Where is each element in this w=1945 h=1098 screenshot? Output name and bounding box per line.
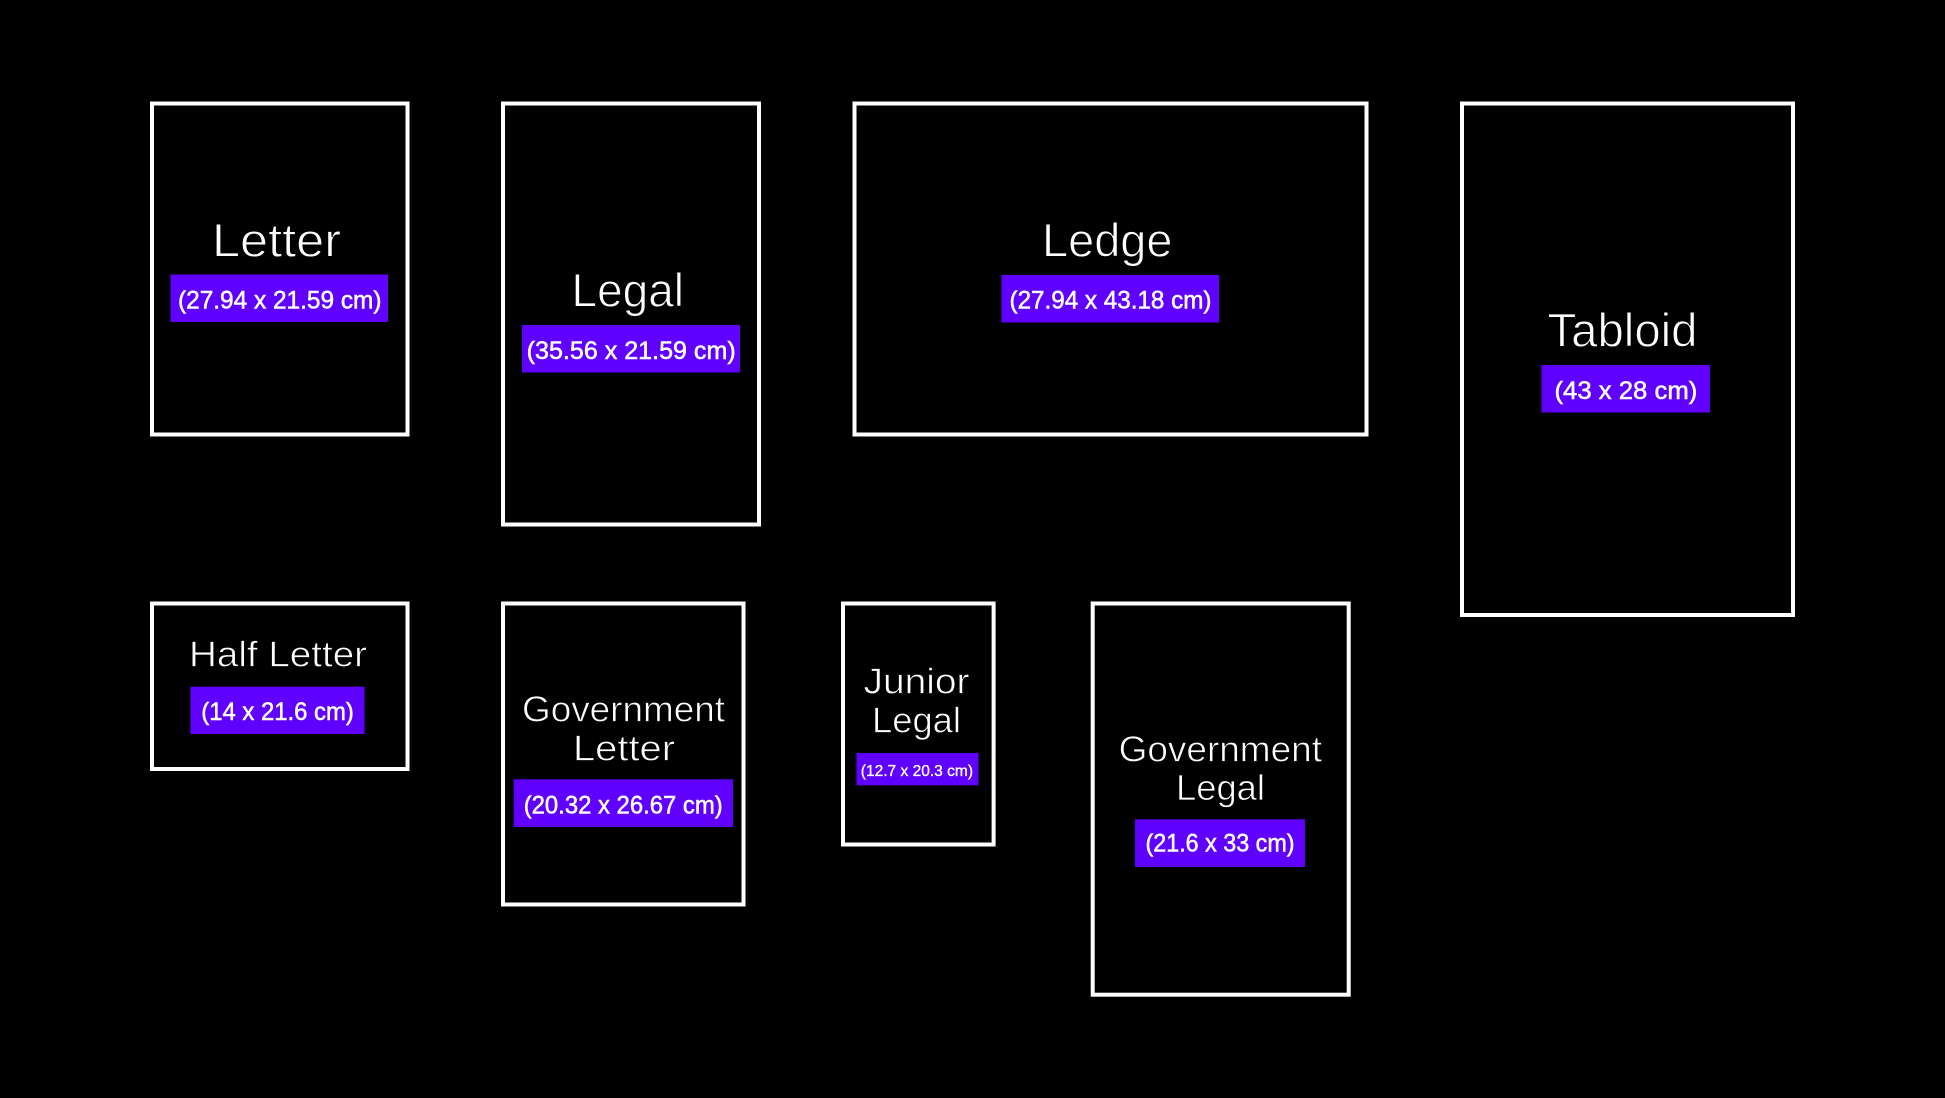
size badge: Government Letter: (20.32 x 26.67 cm) [524, 791, 723, 819]
panel: Tabloid [1462, 104, 1793, 615]
frame: Half Letter [152, 604, 408, 769]
panel: Junior Legal [843, 604, 994, 844]
size badge: Letter: (27.94 x 21.59 cm) [178, 286, 382, 314]
size badge: Government Letter [514, 779, 733, 827]
size badge: Ledge: (27.94 x 43.18 cm) [1010, 287, 1212, 315]
heading: Government Legal [1119, 729, 1322, 808]
frame: Junior Legal [843, 604, 994, 844]
frame: Letter [152, 104, 408, 434]
panel: Government Letter [503, 604, 744, 904]
size badge: Tabloid [1542, 365, 1710, 412]
heading: Government Legal: Legal [1176, 767, 1265, 808]
frame: Government Legal [1093, 604, 1349, 995]
size badge: Legal: (35.56 x 21.59 cm) [527, 337, 736, 365]
heading: Half Letter: Half Letter [189, 634, 367, 675]
heading: Junior Legal: Junior [864, 660, 970, 701]
panel: Ledge [854, 104, 1366, 434]
size badge: Half Letter [190, 687, 364, 734]
heading: Letter: Letter [212, 214, 341, 267]
heading: Government Legal: Government [1119, 729, 1322, 770]
panel: Government Legal [1093, 604, 1349, 995]
panel: Letter [152, 104, 408, 434]
heading: Government Letter: Letter [573, 728, 675, 769]
size badge: Legal [522, 325, 740, 372]
heading: Legal: Legal [572, 264, 684, 316]
heading: Junior Legal [864, 660, 970, 741]
frame: Government Letter [503, 604, 744, 904]
size badge: Government Legal: (21.6 x 33 cm) [1146, 830, 1294, 858]
size badge: Ledge [1002, 275, 1219, 322]
panel: Half Letter [152, 604, 408, 769]
size badge: Government Legal [1135, 819, 1305, 867]
size badge: Half Letter: (14 x 21.6 cm) [201, 698, 354, 726]
frame: Legal [503, 104, 759, 524]
size badge: Junior Legal: (12.7 x 20.3 cm) [861, 763, 973, 780]
heading: Junior Legal: Legal [872, 700, 961, 741]
size badge: Letter [170, 274, 388, 322]
heading: Ledge: Ledge [1042, 213, 1172, 266]
heading: Government Letter: Government [522, 689, 725, 730]
heading: Tabloid: Tabloid [1548, 304, 1698, 356]
size badge: Tabloid: (43 x 28 cm) [1554, 377, 1697, 405]
size badge: Junior Legal [856, 753, 978, 785]
frame: Tabloid [1462, 104, 1793, 615]
frame: Ledge [854, 104, 1366, 434]
panel: Legal [503, 104, 759, 524]
heading: Government Letter [522, 689, 725, 769]
